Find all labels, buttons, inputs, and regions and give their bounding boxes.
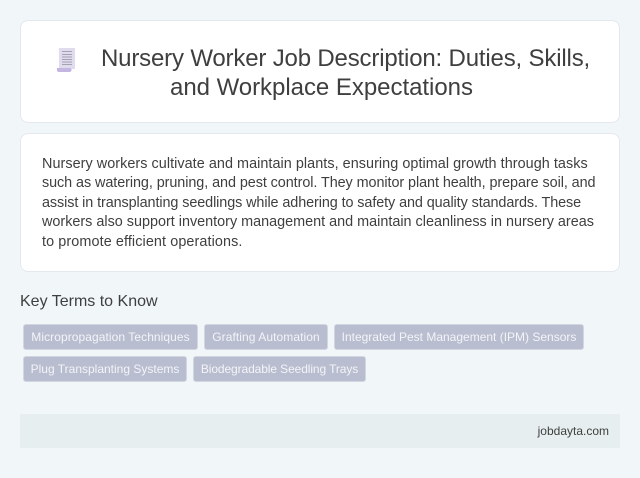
title: and Workplace Expectations: [170, 74, 473, 101]
description text: Nursery workers cultivate and maintain plants, ensuring optimal growth through tasks: [42, 156, 588, 172]
tag: [23, 324, 198, 350]
heading: key terms: Key Terms to Know: [20, 293, 158, 310]
title: [101, 45, 590, 101]
tag: Plug Transplanting Systems: [31, 362, 179, 376]
description text: such as watering, pruning, and pest control. They monitor plant health, prepare soil, and: [42, 175, 595, 191]
footer bar: [20, 414, 620, 448]
tag: Integrated Pest Management (IPM) Sensors: [342, 330, 576, 344]
tag: Grafting Automation: [212, 330, 320, 344]
tag group: key terms: [23, 324, 584, 382]
icon: document: [57, 48, 75, 72]
description text: assist in transplanting seedlings while adhering to safety and quality standards. These: [42, 194, 581, 210]
description text: workers also support inventory management and maintain cleanliness in nursery areas: [42, 214, 594, 230]
footer text: jobdayta.com: [538, 424, 609, 438]
description text: to promote efficient operations.: [42, 234, 243, 250]
panel: title card: [20, 20, 620, 123]
tag: Biodegradable Seedling Trays: [201, 362, 358, 376]
title: Nursery Worker Job Description: Duties, Skills,: [101, 45, 590, 72]
tag: [193, 356, 366, 382]
panel: description: [20, 133, 620, 272]
tag: Micropropagation Techniques: [31, 330, 190, 344]
description text: [42, 156, 595, 250]
tag: [334, 324, 584, 350]
tag: [204, 324, 328, 350]
tag: [23, 356, 187, 382]
